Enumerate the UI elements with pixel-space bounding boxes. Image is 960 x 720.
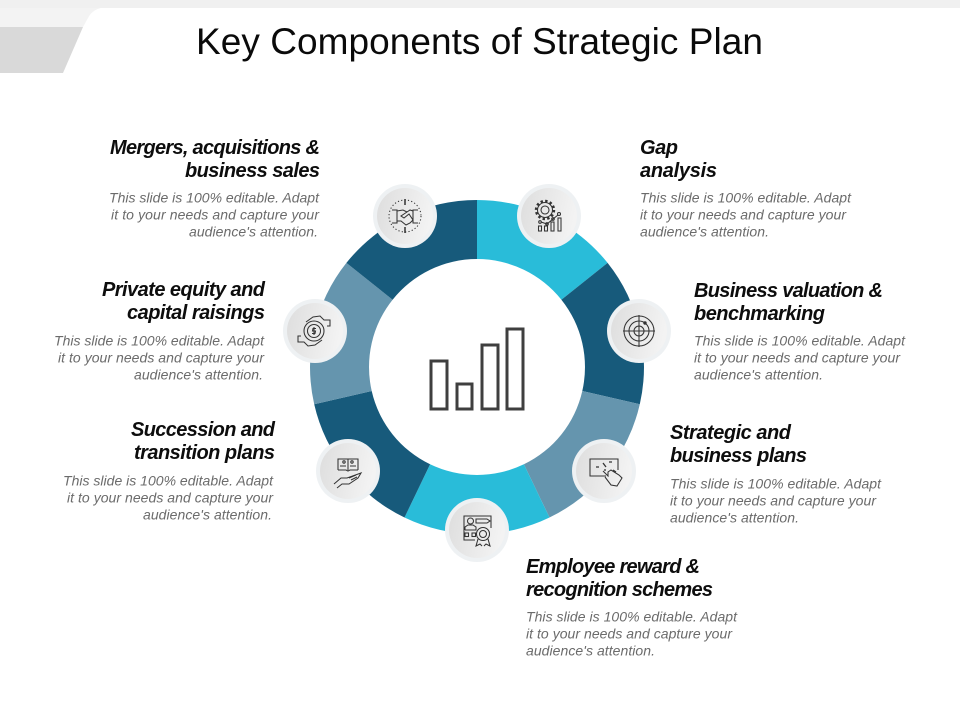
ring chart (310, 200, 644, 534)
text block: mergers: Mergers, acquisitions & (110, 137, 320, 159)
icon: hand on screen (572, 439, 636, 503)
text block: succession (63, 419, 276, 522)
text block: strategic plans (670, 422, 882, 526)
text block: gap analysis: audience's attention. (640, 224, 769, 240)
text block: private equity: Private equity and (102, 279, 266, 301)
text block: private equity: audience's attention. (134, 366, 263, 382)
text block: private equity: it to your needs and capture your (58, 350, 265, 366)
text block: business valuation: Business valuation & (694, 280, 883, 302)
text block: mergers (109, 137, 320, 240)
text block: strategic plans: This slide is 100% editable. Adapt (670, 476, 882, 492)
text block: mergers: This slide is 100% editable. Adapt (109, 190, 320, 206)
text block: business valuation (694, 280, 906, 382)
text block: employee reward: audience's attention. (526, 642, 655, 658)
icon: handshake (373, 184, 437, 248)
text block: employee reward (526, 556, 738, 658)
text block: strategic plans: it to your needs and capture your (670, 492, 877, 508)
text block: succession: transition plans (134, 442, 275, 464)
text block: gap analysis: analysis (640, 160, 717, 182)
icon: certificate (445, 498, 509, 562)
text block: private equity: capital raisings (127, 302, 265, 324)
text block: employee reward: it to your needs and capture your (526, 626, 733, 642)
text block: mergers: business sales (185, 160, 320, 182)
text block: business valuation: it to your needs and capture your (694, 350, 901, 366)
icon: gear and chart (517, 184, 581, 248)
title: Key Components of Strategic Plan (196, 21, 763, 62)
text block: gap analysis: it to your needs and capture your (640, 206, 847, 222)
icon: hand holding book (316, 439, 380, 503)
text block: succession: audience's attention. (143, 506, 272, 522)
header background shapes (0, 0, 960, 73)
text block: succession: it to your needs and capture your (67, 490, 274, 506)
text block: gap analysis: This slide is 100% editable. Adapt (640, 190, 852, 206)
text block: business valuation: audience's attention. (694, 366, 823, 382)
text block: employee reward: This slide is 100% editable. Adapt (526, 608, 738, 624)
text block: private equity: This slide is 100% editable. Adapt (54, 332, 265, 348)
text block: business valuation: This slide is 100% editable. Adapt (694, 332, 906, 348)
text block: mergers: it to your needs and capture your (111, 206, 320, 222)
icon: radar target (607, 299, 671, 363)
text block: strategic plans: Strategic and (670, 422, 792, 444)
icon: hands with dollar (283, 299, 347, 363)
text block: private equity (54, 279, 266, 382)
text block: strategic plans: business plans (670, 445, 807, 467)
text block: succession: Succession and (131, 419, 276, 441)
text block: gap analysis: Gap (640, 137, 678, 159)
text block: employee reward: Employee reward & (526, 556, 700, 578)
text block: strategic plans: audience's attention. (670, 510, 799, 526)
text block: gap analysis (640, 137, 852, 240)
text block: employee reward: recognition schemes (526, 579, 713, 601)
text block: succession: This slide is 100% editable. Adapt (63, 472, 274, 488)
center icon: bar chart (431, 329, 523, 409)
text block: mergers: audience's attention. (189, 224, 318, 240)
text block: business valuation: benchmarking (694, 303, 825, 325)
